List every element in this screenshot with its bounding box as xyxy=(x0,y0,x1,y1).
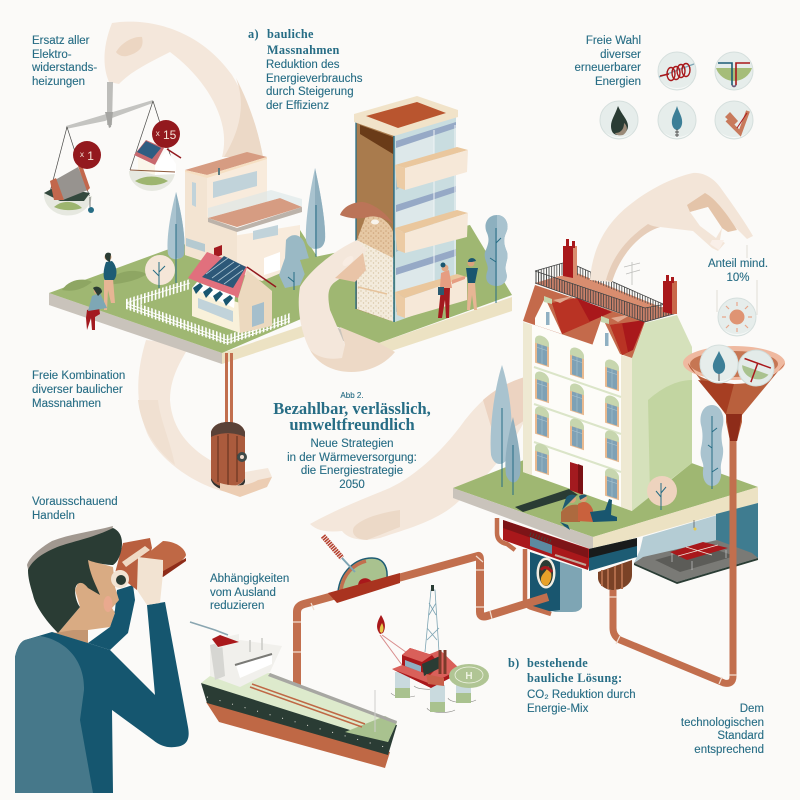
mansard roof xyxy=(523,285,645,358)
text: Dem technologischen Standard: Dem xyxy=(740,703,764,715)
oil rig xyxy=(377,585,489,713)
rust keel xyxy=(206,702,390,768)
upper left arm holding the scale xyxy=(104,22,263,157)
text: Freie Kombination: Freie Kombination xyxy=(32,370,125,382)
small front house with solar roof xyxy=(188,252,276,333)
lower left arm holding storage tank xyxy=(138,340,272,492)
helipad: H xyxy=(465,671,473,682)
cone tree right xyxy=(306,168,325,260)
text: a) bauliche Massnahmen xyxy=(248,27,363,112)
text: Vorausschauend Handeln: Handeln xyxy=(32,510,75,522)
title block: Abb 2. xyxy=(340,391,364,400)
antenna xyxy=(624,262,640,285)
hobby room xyxy=(634,503,758,582)
picket fence xyxy=(126,279,290,345)
title block xyxy=(273,391,431,491)
hair xyxy=(27,526,122,633)
left pan with electric heater xyxy=(44,165,94,216)
red control box xyxy=(503,520,593,570)
ear and cheek xyxy=(104,596,112,612)
text: Ersatz aller: Elektro- xyxy=(32,49,72,61)
icon: wood xyxy=(715,101,753,139)
green side facade xyxy=(632,315,692,511)
text: a) bauliche Massnahmen: a) xyxy=(248,27,259,41)
big forearm pointing at valve xyxy=(310,377,525,540)
lawn xyxy=(49,230,345,353)
white front facade xyxy=(523,322,632,511)
chimney left xyxy=(563,239,577,278)
text: Dem technologischen Standard: technologischen xyxy=(681,717,764,729)
man with binoculars xyxy=(15,526,189,793)
gripping hand xyxy=(137,557,163,605)
hand gripping the wall section xyxy=(299,202,395,372)
badge x1: ˣ 1 xyxy=(80,149,94,163)
upper pipe of boiler xyxy=(497,518,515,550)
badge x15: ˣ 15 xyxy=(156,128,177,142)
ping pong table xyxy=(670,542,728,570)
text: Vorausschauend Handeln: Vorausschauend xyxy=(32,496,118,508)
oil tanker xyxy=(190,622,397,768)
apartment tower xyxy=(354,96,468,322)
pale trees xyxy=(491,365,521,495)
text: a) bauliche Massnahmen: bauliche xyxy=(267,27,314,41)
railing xyxy=(535,263,677,322)
funnel with energy balls xyxy=(683,345,785,441)
text: Ersatz aller: heizungen xyxy=(32,76,85,88)
facade windows xyxy=(535,334,549,367)
ground side faces xyxy=(453,488,593,550)
modern house xyxy=(185,152,302,281)
black hull xyxy=(201,683,397,755)
text: Freie Wahl: erneuerbarer xyxy=(575,62,641,74)
text: Abhaengigkeiten: reduzieren xyxy=(210,600,264,612)
text: Abhaengigkeiten: Abhängigkeiten xyxy=(210,573,289,585)
round tree xyxy=(145,255,175,288)
valve with spring xyxy=(323,536,400,603)
brown heat storage xyxy=(598,560,632,590)
green ground xyxy=(453,430,758,537)
arm above building dropping energy xyxy=(590,173,753,282)
title block: Neue Strategien xyxy=(310,438,394,450)
sun energy ball xyxy=(718,298,756,336)
roof xyxy=(354,96,458,136)
deck xyxy=(392,650,460,688)
deck xyxy=(201,673,397,742)
roof terrace xyxy=(555,273,663,308)
roof tile sample xyxy=(340,202,393,224)
torso xyxy=(15,602,189,793)
text: a) bauliche Massnahmen: Reduktion des xyxy=(266,59,340,71)
teal control box xyxy=(589,538,637,571)
storage tank held in the hand xyxy=(211,353,272,497)
dormers xyxy=(535,298,562,334)
grey radiator xyxy=(530,534,552,554)
two people talking xyxy=(438,258,478,318)
funnel pipe to storage xyxy=(609,408,737,684)
old apartment building xyxy=(310,239,758,550)
balance scale xyxy=(44,82,181,216)
ball: geothermal in funnel xyxy=(733,345,779,391)
text: Anteil mind: 10% xyxy=(726,272,750,284)
text: b) bestehende bauliche Loesung: bauliche Lösung: xyxy=(527,671,622,685)
chimney right xyxy=(663,275,677,314)
couple on the lawn xyxy=(560,494,617,530)
water rings xyxy=(391,686,476,713)
cut insulation wall xyxy=(356,122,394,322)
text: a) bauliche Massnahmen: Massnahmen xyxy=(267,43,340,57)
text: Abhaengigkeiten: vom Ausland xyxy=(210,587,276,599)
derrick xyxy=(425,590,439,652)
binoculars xyxy=(111,538,186,590)
text: Freie Wahl: diverser xyxy=(600,49,641,61)
title block: in der Wärmeversorgung: xyxy=(287,452,417,464)
text: b) bestehende bauliche Loesung: Energie-Mix xyxy=(527,703,589,715)
text: Freie Wahl: Energien xyxy=(595,76,641,88)
glazing xyxy=(396,130,434,172)
module house xyxy=(402,648,440,675)
text: Ersatz aller: Ersatz aller xyxy=(32,35,90,47)
platform sides xyxy=(49,293,222,364)
slim tree by the tower xyxy=(485,215,508,303)
title block: die Energiestrategie xyxy=(301,465,403,477)
slim tree on the right xyxy=(700,405,723,489)
flare boom xyxy=(380,635,410,665)
text: Freie Wahl: Freie Wahl xyxy=(586,35,641,47)
icon: gas flame xyxy=(658,101,696,139)
text: b) bestehende bauliche Loesung: bestehende xyxy=(527,656,588,670)
right pan with solar house xyxy=(129,140,181,191)
bush xyxy=(279,235,310,290)
icon: solar thermal coil xyxy=(658,52,696,90)
text: b) bestehende bauliche Loesung: CO₂ Reduktion durch xyxy=(527,689,636,701)
balconies xyxy=(395,147,468,168)
text: Dem technologischen Standard: Standard xyxy=(717,730,764,742)
icon: geothermal probe xyxy=(715,52,753,90)
insulation sample xyxy=(357,213,393,258)
legs xyxy=(395,672,410,698)
text: Freie Kombination: diverser baulicher xyxy=(32,384,123,396)
text: Dem technologischen Standard: entsprechend xyxy=(694,744,764,756)
raised near arm xyxy=(88,585,135,650)
round tree right xyxy=(647,476,677,510)
boiler xyxy=(530,552,582,612)
lower boiler pipe xyxy=(525,549,551,614)
icon: oil drop xyxy=(600,101,638,139)
falling line marks xyxy=(717,245,757,315)
right platform with tower xyxy=(300,96,512,355)
text: b) bestehende bauliche Loesung: b) xyxy=(508,656,520,670)
ball: gas flame in funnel xyxy=(700,345,738,383)
text: a) bauliche Massnahmen: der Effizienz xyxy=(266,100,329,112)
text: Ersatz aller: widerstands- xyxy=(31,62,97,74)
fingers xyxy=(299,240,367,359)
title block: 2050 xyxy=(339,479,365,491)
man standing xyxy=(104,253,116,310)
bridge xyxy=(212,634,239,648)
basement with heating system xyxy=(497,503,758,614)
neck and face xyxy=(52,560,119,643)
title block: umweltfreundlich xyxy=(289,415,415,434)
text: Anteil mind: Anteil mind. xyxy=(708,258,768,270)
palm shadow xyxy=(310,327,395,372)
left platform with houses xyxy=(49,152,345,364)
thumb of the holding hand xyxy=(220,477,272,497)
pipeline from ship to boiler xyxy=(293,556,548,697)
text: a) bauliche Massnahmen: Energieverbrauchs xyxy=(266,73,363,85)
woman sitting on the ledge xyxy=(86,287,107,330)
icons renewable energies xyxy=(600,52,753,139)
superstructure xyxy=(210,640,282,687)
title block: Bezahlbar, verlässlich, xyxy=(273,399,431,418)
text: Freie Kombination: Massnahmen xyxy=(32,398,101,410)
text: a) bauliche Massnahmen: durch Steigerung xyxy=(266,86,354,98)
cone tree left xyxy=(167,192,185,283)
text: b) bestehende bauliche Loesung xyxy=(508,656,636,715)
entrance door xyxy=(570,462,583,495)
